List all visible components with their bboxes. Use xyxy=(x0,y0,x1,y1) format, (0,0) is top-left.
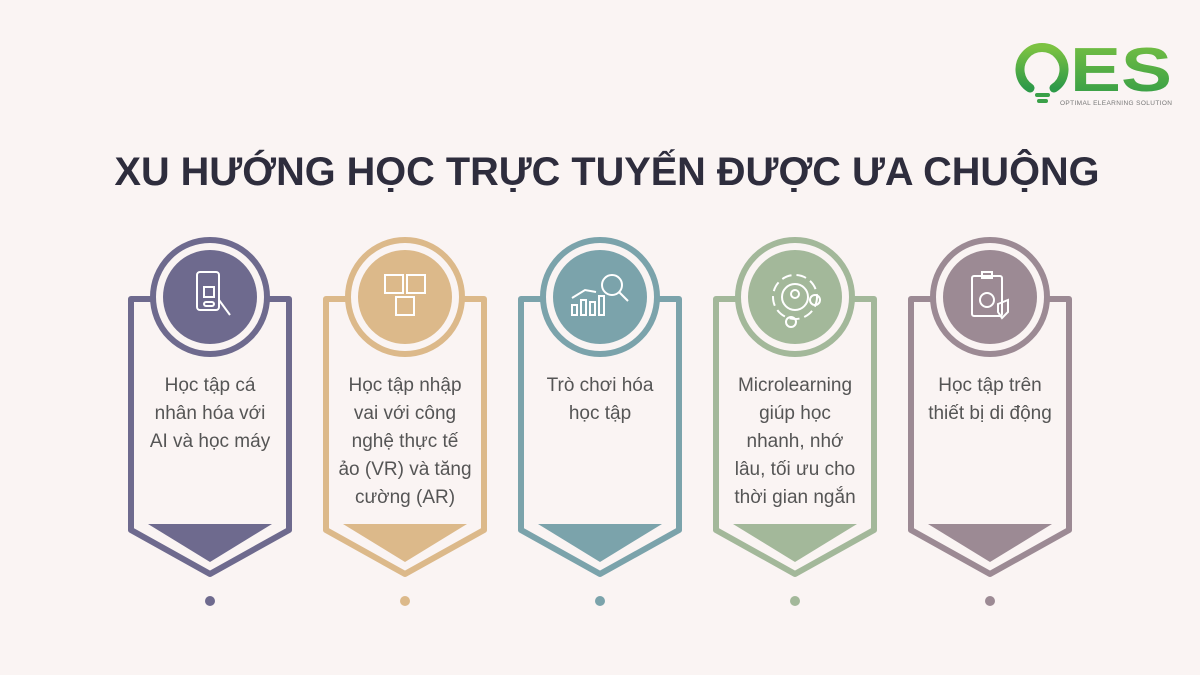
logo: OPTIMAL ELEARNING SOLUTION xyxy=(1060,100,1172,107)
card 1: AI và học máy xyxy=(150,431,271,452)
card 2: ảo (VR) và tăng xyxy=(338,459,472,480)
logo xyxy=(1020,36,1172,107)
card 2 xyxy=(326,240,484,606)
title: XU HƯỚNG HỌC TRỰC TUYẾN ĐƯỢC ƯA CHUỘNG xyxy=(114,148,1100,194)
card 3: học tập xyxy=(569,403,631,424)
icon: chart magnifier xyxy=(572,275,628,315)
card 3: Trò chơi hóa xyxy=(547,375,654,396)
card 2: vai với công xyxy=(354,403,456,424)
card 5: thiết bị di động xyxy=(928,403,1052,424)
logo: ES xyxy=(1070,36,1172,105)
icon: phone xyxy=(197,272,230,315)
icon: boxes xyxy=(385,275,425,315)
card 4 xyxy=(716,240,874,606)
card 1: nhân hóa với xyxy=(155,403,265,424)
card 4: Microlearning xyxy=(738,375,852,396)
card 1: Học tập cá xyxy=(165,375,256,396)
card 2: cường (AR) xyxy=(355,487,455,508)
card 2: Học tập nhập xyxy=(348,375,462,396)
card 1 xyxy=(131,240,289,606)
card 4: lâu, tối ưu cho xyxy=(735,459,855,480)
card 5: Học tập trên xyxy=(938,375,1042,396)
card 2: nghệ thực tế xyxy=(352,431,459,452)
icon: gear cycle xyxy=(773,275,820,327)
card 4: giúp học xyxy=(759,403,831,424)
card 4: nhanh, nhớ xyxy=(746,431,844,452)
card 5 xyxy=(911,240,1069,606)
card 4: thời gian ngắn xyxy=(734,486,856,508)
card 3 xyxy=(521,240,679,606)
icon: clipboard xyxy=(972,272,1008,318)
